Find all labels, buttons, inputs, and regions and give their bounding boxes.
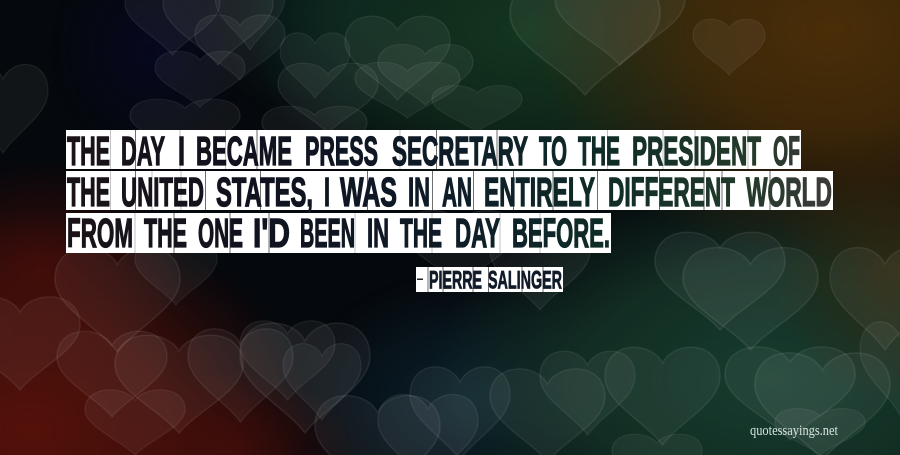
- quote line 2: AN: [442, 169, 472, 215]
- attribution: SALINGER: [488, 266, 562, 294]
- quote line 1: THE: [578, 128, 620, 174]
- quote line 3: THE: [144, 210, 187, 256]
- quote line 3: THE: [400, 210, 442, 256]
- quote line 2: ENTIRELY: [484, 169, 595, 215]
- quote line 3: BEEN: [300, 210, 355, 256]
- quote line 2: WAS: [340, 169, 397, 215]
- quote line 2: I: [324, 169, 330, 215]
- quote line 1: PRESIDENT: [632, 128, 761, 174]
- quote line 2: THE: [67, 169, 110, 215]
- quote line 3: I'D: [253, 210, 290, 256]
- quote line 1: BECAME: [196, 128, 292, 174]
- quote line 3: FROM: [67, 210, 133, 256]
- quote line 3: BEFORE.: [512, 210, 610, 256]
- quote text block: OF: [773, 128, 800, 174]
- quote text block: [66, 128, 833, 256]
- quote line 2: WORLD: [746, 169, 832, 215]
- quote line 2: IN: [408, 169, 430, 215]
- quote line 1: TO: [539, 128, 567, 174]
- quote line 1: [66, 128, 801, 174]
- quote line 2: DIFFERENT: [608, 169, 735, 215]
- quote line 1: SECRETARY: [392, 128, 528, 174]
- attribution: PIERRE: [429, 266, 482, 294]
- quote line 3: DAY: [455, 210, 500, 256]
- quote line 1: THE: [67, 128, 110, 174]
- watermark: quotessayings.net: [750, 423, 839, 439]
- quote line 1: PRESS: [305, 128, 378, 174]
- quote line 2: [66, 169, 833, 215]
- quote line 2: STATES,: [216, 169, 313, 215]
- quote line 3: [66, 210, 611, 256]
- quote line 1: DAY: [121, 128, 165, 174]
- quote line 2: UNITED: [121, 169, 204, 215]
- attribution: [416, 266, 563, 294]
- quote line 1: I: [178, 128, 185, 174]
- quote line 3: ONE: [198, 210, 243, 256]
- quote line 3: IN: [367, 210, 389, 256]
